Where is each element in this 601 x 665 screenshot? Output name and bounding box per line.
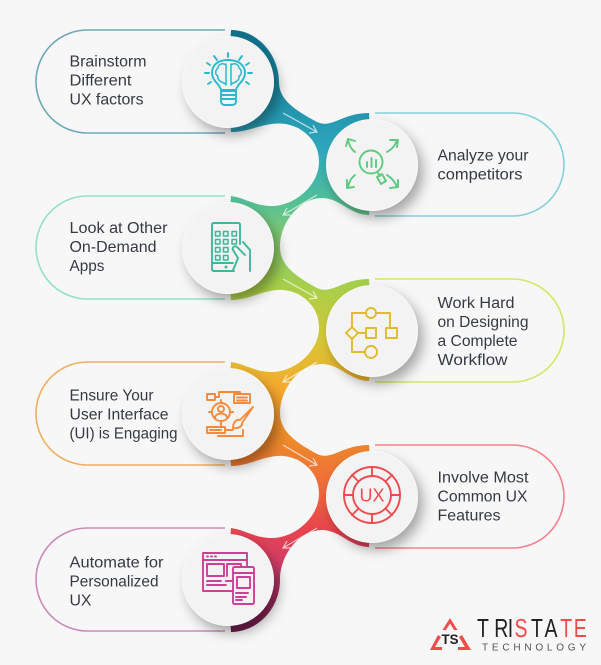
text: workflow: on Designing (438, 314, 528, 331)
icon: web and mobile screens (203, 553, 254, 604)
text: on-demand apps: Apps (70, 258, 105, 275)
panel: brainstorm outline (36, 30, 225, 133)
text: brainstorm (70, 54, 146, 108)
logo: Tristate Technology: S (515, 613, 528, 643)
text: UX features: Common UX (438, 488, 528, 506)
panel: on-demand apps outline (36, 196, 225, 299)
text: automate: Automate for (70, 554, 164, 572)
icon: UX dial (344, 467, 400, 523)
logo: Tristate Technology: TECHNOLOGY (482, 642, 586, 654)
text: brainstorm: Brainstorm (70, 54, 146, 70)
logo: Tristate Technology: A (545, 613, 558, 643)
arrow: step 3 to 4 (283, 279, 317, 299)
logo: Tristate Technology: TS (442, 631, 458, 647)
text: engaging UI: (UI) is Engaging (70, 426, 178, 442)
text: workflow: a Complete (438, 333, 518, 350)
icon: user interface target and brush (207, 392, 253, 436)
text: engaging UI: Ensure Your (70, 388, 154, 404)
panel: UX features outline (375, 445, 564, 548)
icon: phone keypad and hand (212, 223, 250, 271)
arrow: step 6 to 7 (283, 528, 317, 548)
text: UX features: Features (438, 508, 501, 524)
text: UX features: Involve Most (438, 470, 529, 486)
icon: magnifier with arrows (346, 139, 398, 188)
arrow: step 2 to 3 (283, 195, 317, 215)
logo: Tristate Technology: E (574, 613, 587, 643)
text: automate: UX (70, 592, 92, 610)
icon: UX dial: UX (359, 486, 385, 506)
logo: Tristate Technology: R (494, 613, 508, 643)
text: on-demand apps: Look at Other (70, 220, 168, 237)
logo: Tristate Technology: T (560, 613, 572, 643)
arrow: step 5 to 6 (283, 445, 317, 466)
logo: Tristate Technology: I (508, 613, 513, 643)
text: engaging UI (70, 388, 178, 442)
text: competitors (438, 148, 528, 184)
text: brainstorm: UX factors (70, 92, 144, 108)
arrow: step 4 to 5 (283, 362, 317, 382)
connecting gradient ribbon (228, 30, 372, 632)
text: on-demand apps: On-Demand (70, 239, 156, 256)
text: workflow: Work Hard (438, 295, 514, 312)
circle badges (182, 36, 418, 626)
logo: Tristate Technology: T (531, 613, 543, 643)
logo: Tristate Technology (430, 613, 587, 654)
text: workflow (438, 295, 528, 369)
text: automate (70, 554, 164, 610)
text: on-demand apps (70, 220, 168, 275)
panel: automate outline (36, 528, 225, 631)
text: competitors: competitors (438, 166, 523, 184)
icon: brain light bulb (205, 53, 252, 105)
text: automate: Personalized (70, 574, 158, 590)
text: competitors: Analyze your (438, 148, 528, 164)
panel: competitors outline (375, 113, 564, 216)
text: UX features (438, 470, 529, 524)
panel: workflow outline (375, 279, 564, 382)
text: engaging UI: User Interface (70, 406, 168, 424)
logo: Tristate Technology: T (477, 613, 489, 643)
arrow: step 1 to 2 (283, 113, 317, 133)
icon: workflow diagram (346, 308, 397, 358)
text: workflow: Workflow (438, 352, 508, 369)
text: brainstorm: Different (70, 72, 132, 90)
panel: engaging UI outline (36, 362, 225, 465)
